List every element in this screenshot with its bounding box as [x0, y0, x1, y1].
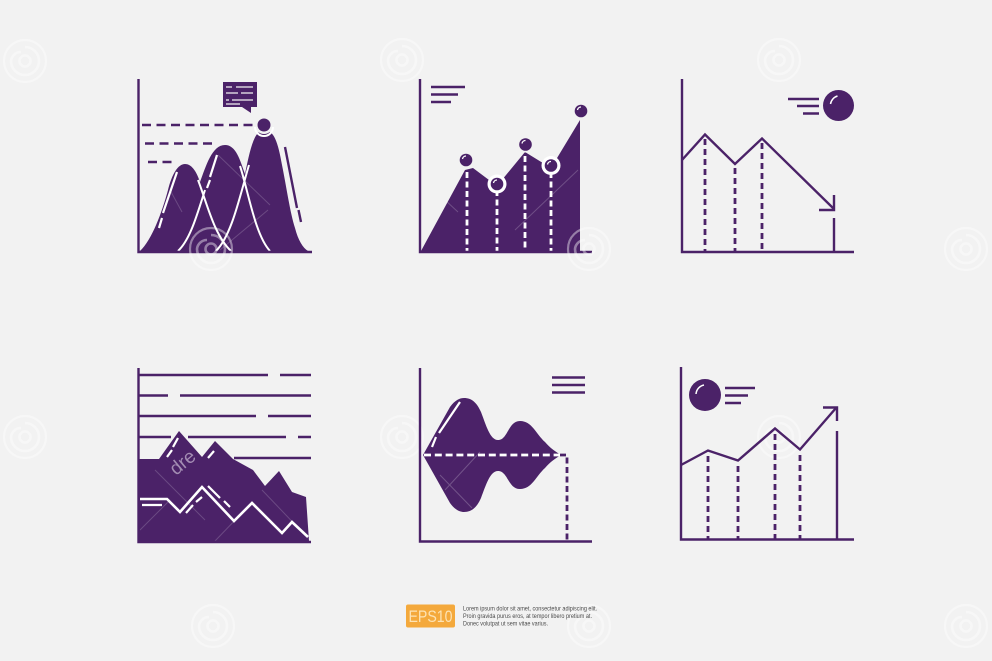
- white trend line: [140, 487, 308, 537]
- chart 2 spiral watermark: [568, 228, 610, 270]
- horizontal lines: [139, 375, 311, 458]
- EPS10 badge: EPS10: [408, 607, 452, 626]
- chart 2: area chart with markers: [420, 79, 592, 252]
- violin shape: [423, 398, 561, 512]
- peak highlights: [159, 155, 217, 228]
- drop line: [833, 218, 835, 252]
- arrow head: [823, 408, 837, 421]
- chart 6: rising line chart: [681, 367, 854, 540]
- side tick lines: [285, 147, 301, 222]
- axes: [420, 368, 592, 542]
- icon: moving ball: [788, 90, 854, 121]
- white curve separators: [178, 165, 270, 251]
- dashed drop lines: [708, 434, 800, 539]
- bell curve areas: [140, 130, 308, 251]
- axes: [138, 79, 312, 252]
- rising arrow line: [681, 408, 836, 465]
- lorem ipsum caption: Proin gravida purus eros, at tempor libero pretium at.: [463, 613, 592, 620]
- legend lines: [431, 87, 465, 102]
- dashed drop lines: [705, 139, 762, 251]
- dashed level lines: [142, 125, 254, 162]
- faint watermark lines: [140, 470, 305, 541]
- chart 3: declining line chart: [682, 79, 854, 252]
- lorem ipsum caption: Lorem ipsum dolor sit amet, consectetur adipiscing elit.: [463, 606, 597, 612]
- axes: [420, 79, 592, 252]
- axes: [681, 367, 854, 540]
- faint watermark lines: [440, 452, 480, 508]
- arrow head: [819, 195, 834, 210]
- icon: moving ball: [689, 379, 755, 411]
- declining arrow line: [682, 134, 834, 209]
- icon: speech bubble: [223, 82, 257, 113]
- area: [421, 120, 580, 251]
- mountain area: [138, 431, 309, 541]
- legend lines: [552, 378, 585, 392]
- axes: [682, 79, 854, 252]
- faint watermark lines: [445, 170, 578, 230]
- chart 1 spiral watermark: [190, 228, 232, 270]
- lorem ipsum caption: [463, 606, 597, 628]
- drop line: [836, 431, 838, 540]
- dashed drop lines: [467, 156, 551, 251]
- chart 1: overlapping bell curves: [138, 79, 312, 252]
- faint watermark lines: [170, 155, 270, 250]
- watermark text: dre: [166, 446, 200, 480]
- dark dashed drop line: [560, 455, 567, 540]
- highlight: [432, 402, 460, 447]
- white highlights: [142, 438, 230, 513]
- peak marker: [255, 116, 273, 136]
- chart 4: mountain area chart with lines: [138, 368, 311, 542]
- data point markers: [458, 103, 589, 194]
- axes: [138, 368, 311, 542]
- lorem ipsum caption: Donec volutpat ut sem vitae varius.: [463, 620, 548, 628]
- chart 5: violin area chart: [420, 368, 592, 542]
- white dashed center line: [424, 454, 560, 456]
